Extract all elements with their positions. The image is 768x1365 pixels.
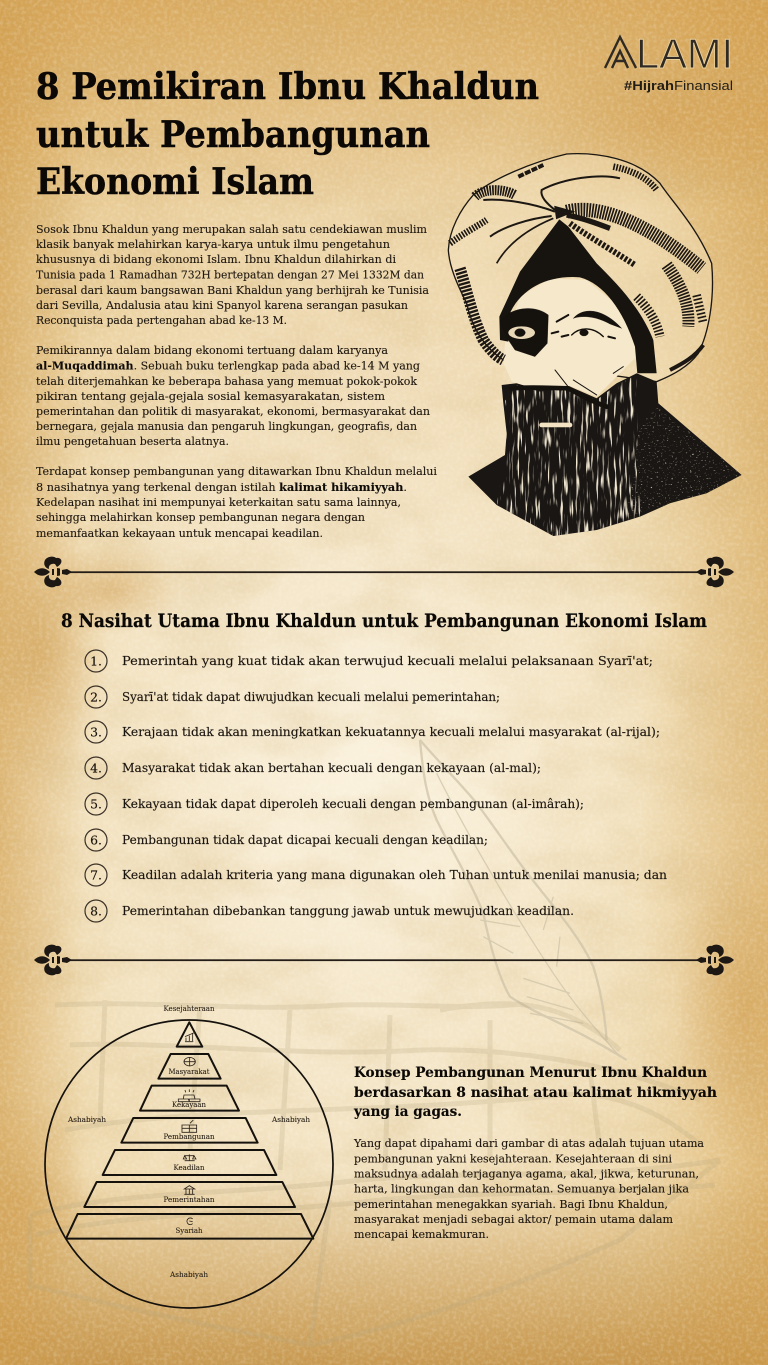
paragraph 1: berasal dari kaum bangsawan Bani Khaldun yang berhijrah ke Tunisia (36, 284, 429, 297)
logo mark: stylised A (605, 37, 636, 68)
pyramid labels: Kekayaan (172, 1100, 206, 1109)
paragraph 1: khususnya di bidang ekonomi Islam. Ibnu Khaldun dilahirkan di (36, 253, 396, 266)
item 3 (85, 721, 660, 743)
item 5 (85, 793, 584, 815)
paragraph 3 (36, 465, 437, 540)
pyramid labels (67, 1004, 310, 1279)
paragraph 1: klasik banyak melahirkan karya-karya untuk ilmu pengetahun (36, 238, 390, 251)
eyebrows and eyes (500, 308, 623, 395)
portrait: Ibnu Khaldun engraving (448, 154, 742, 536)
paragraph 3: Kedelapan nasihat ini mempunyai keterkaitan satu sama lainnya, (36, 496, 401, 509)
paragraph 2: al-Muqaddimah. Sebuah buku terlengkap pada abad ke-14 M yang (36, 358, 420, 372)
robe fine speckle (627, 407, 742, 517)
icon: scale (183, 1154, 196, 1161)
item 8 (85, 900, 574, 922)
icon: bricks (182, 1120, 197, 1132)
icon: community (184, 1057, 195, 1066)
concept heading: Konsep Pembangunan Menurut Ibnu Khaldun (354, 1064, 707, 1081)
concept body text: Yang dapat dipahami dari gambar di atas adalah tujuan utama (353, 1137, 704, 1150)
paragraph 1: Reconquista pada pertengahan abad ke-13 M. (36, 314, 287, 327)
concept body text: pembangunan yakni kesejahteraan. Kesejahteraan di sini (354, 1152, 672, 1166)
mustache and mouth (512, 388, 607, 425)
face (503, 278, 637, 397)
ornament left (34, 945, 72, 975)
item 3: Kerajaan tidak akan meningkatkan kekuatannya kecuali melalui masyarakat (al-rijal); (122, 724, 660, 739)
item 8: Pemerintahan dibebankan tanggung jawab untuk mewujudkan keadilan. (122, 903, 574, 918)
robe and beard mass (468, 373, 742, 536)
paragraph 1 (36, 223, 429, 327)
concept heading: yang ia gagas. (353, 1103, 462, 1120)
item 1: 1. (90, 654, 102, 668)
paragraph 1: Sosok Ibnu Khaldun yang merupakan salah satu cendekiawan muslim (36, 223, 427, 236)
paragraph 3: memanfaatkan kekayaan untuk mencapai keadilan. (36, 527, 323, 540)
turban outline (448, 154, 713, 382)
pyramid labels: Pembangunan (164, 1132, 215, 1141)
icon: gold bars (178, 1089, 200, 1102)
background sketch: old books (30, 1000, 720, 1345)
concept heading: berdasarkan 8 nasihat atau kalimat hikmiyyah (354, 1084, 718, 1101)
numbered advice list (85, 650, 667, 922)
item 1 (85, 650, 653, 672)
pyramid labels: Ashabiyah (271, 1115, 310, 1124)
pyramid labels: Ashabiyah (67, 1115, 106, 1124)
item 5: 5. (90, 796, 102, 812)
icon: institution (184, 1186, 195, 1194)
logo wordmark: LAMI (636, 30, 733, 77)
concept heading (353, 1064, 718, 1120)
item 3: 3. (90, 724, 102, 740)
item 2 (85, 686, 500, 708)
item 8: 8. (90, 904, 102, 918)
pyramid icons (178, 1032, 200, 1225)
icon: crescent (187, 1218, 193, 1225)
pyramid labels: Kesejahteraan (164, 1004, 215, 1013)
item 4 (85, 757, 541, 779)
pyramid labels: Masyarakat (168, 1067, 210, 1076)
pyramid labels: Syariah (176, 1226, 203, 1235)
item 6: Pembangunan tidak dapat dicapai kecuali dengan keadilan; (122, 832, 488, 847)
concept body text (353, 1137, 704, 1241)
title: untuk Pembangunan (36, 114, 430, 156)
divider top with ornaments (34, 557, 734, 587)
logo: ALAMI #HijrahFinansial (605, 30, 733, 93)
title: Ekonomi Islam (36, 161, 314, 203)
ornament right (696, 945, 734, 975)
icon: growth chart (185, 1032, 195, 1042)
paragraph 1: Tunisia pada 1 Ramadhan 732H bertepatan dengan 27 Mei 1332M dan (36, 268, 424, 282)
pyramid labels: Pemerintahan (164, 1195, 215, 1204)
paragraph 3: Terdapat konsep pembangunan yang ditawarkan Ibnu Khaldun melalui (36, 465, 437, 478)
concept body text: masyarakat menjadi sebagai aktor/ pemain utama dalam (354, 1213, 673, 1226)
item 6 (85, 829, 488, 851)
title: 8 Pemikiran Ibnu Khaldun (36, 66, 539, 108)
title (36, 66, 539, 203)
item 7 (85, 864, 667, 886)
paragraph 3: 8 nasihatnya yang terkenal dengan istilah kalimat hikamiyyah. (36, 480, 407, 494)
item 6: 6. (90, 832, 102, 848)
logo tagline: #Hijrah Finansial (624, 78, 733, 93)
item 1: Pemerintah yang kuat tidak akan terwujud kecuali melalui pelaksanaan Syarī'at; (122, 653, 653, 668)
pyramid labels: Keadilan (174, 1163, 205, 1172)
paragraph 1: dari Sevilla, Andalusia atau kini Spanyol karena serangan pasukan (36, 299, 408, 312)
paragraph 2: ilmu pengetahuan beserta alatnya. (36, 435, 229, 448)
concept body text: maksudnya adalah terjaganya agama, akal, jikwa, keturunan, (354, 1168, 699, 1180)
item 2: 2. (90, 690, 102, 704)
paragraph 2: telah diterjemahkan ke beberapa bahasa yang memuat pokok-pokok (36, 375, 417, 388)
paragraph 2: Pemikirannya dalam bidang ekonomi tertuang dalam karyanya (36, 344, 388, 357)
paragraph 3: sehingga melahirkan konsep pembangunan negara dengan (36, 511, 365, 524)
beard streaks (497, 375, 640, 536)
paragraph 2: bernegara, gejala manusia dan pengaruh lingkungan, geografis, dan (36, 420, 417, 433)
ornament right (696, 557, 734, 587)
concept body text: mencapai kemakmuran. (354, 1228, 489, 1241)
background sketch: feather (420, 740, 627, 1060)
item 7: 7. (90, 868, 102, 882)
item 2: Syarī'at tidak dapat diwujudkan kecuali melalui pemerintahan; (122, 689, 500, 704)
concept body text: harta, lingkungan dan kehormatan. Semuanya berjalan jika (354, 1182, 689, 1196)
item 7: Keadilan adalah kriteria yang mana digunakan oleh Tuhan untuk menilai manusia; dan (122, 867, 667, 882)
head cloth cone (499, 219, 657, 373)
section heading: 8 Nasihat: 8 Nasihat Utama Ibnu Khaldun untuk Pembangunan Ekonomi Islam (61, 611, 707, 632)
paragraph 2: pikiran tentang gejala-gejala sosial kemasyarakatan, sistem (36, 390, 385, 403)
paragraph 2: pemerintahan dan politik di masyarakat, ekonomi, bermasyarakat dan (36, 405, 430, 418)
diagram: pyramid inside circle (45, 1004, 333, 1308)
paragraph 2 (36, 344, 430, 448)
ornament left (34, 557, 72, 587)
pyramid layers (66, 1022, 313, 1239)
concept body text: pemerintahan menegakkan syariah. Bagi Ibnu Khaldun, (354, 1198, 668, 1211)
pyramid labels: Ashabiyah (169, 1270, 208, 1279)
item 4: Masyarakat tidak akan bertahan kecuali dengan kekayaan (al-mal); (122, 760, 541, 775)
turban folds and hatching (450, 165, 703, 370)
item 4: 4. (90, 760, 102, 776)
intro text block (36, 223, 437, 540)
circle: ashabiyah (45, 1020, 333, 1308)
divider bottom with ornaments (34, 945, 734, 975)
item 5: Kekayaan tidak dapat diperoleh kecuali dengan pembangunan (al-imârah); (122, 796, 584, 811)
